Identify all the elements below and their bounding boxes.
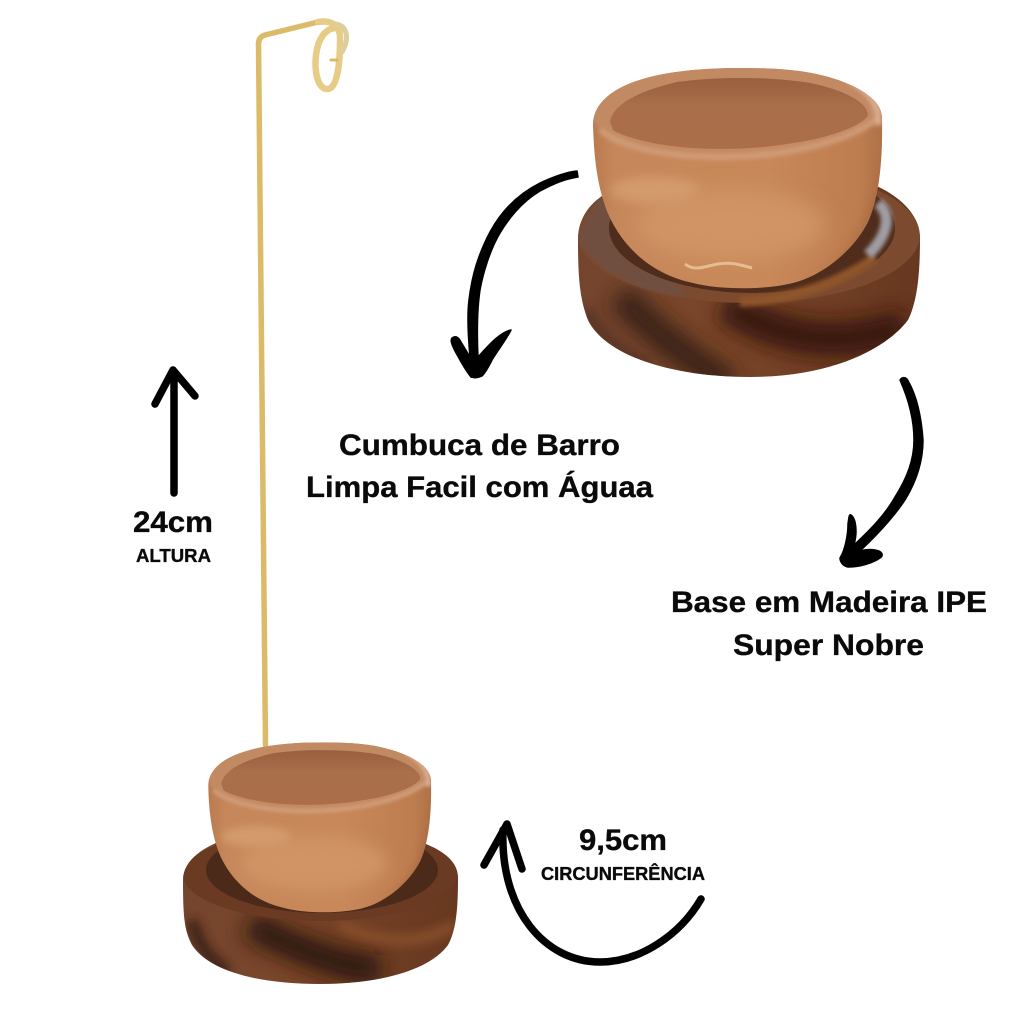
label: bowl description [306, 429, 653, 504]
label: height measurement: 24cm [133, 506, 213, 539]
large clay bowl [585, 60, 895, 300]
label: bowl description: Cumbuca de Barro [339, 429, 620, 462]
large wood base [578, 186, 920, 377]
arrow: bowl to bowl label [451, 171, 578, 378]
small wood base [183, 843, 458, 984]
arrow: height [155, 370, 195, 493]
small product photo: wood base and clay bowl [175, 736, 465, 990]
arrow: base to base label [840, 378, 923, 567]
label: bowl description: Limpa Facil com Águaa [306, 470, 653, 504]
small clay bowl [202, 736, 441, 921]
arrow: circumference [484, 824, 701, 962]
large product photo: wood base and clay bowl [570, 60, 930, 385]
label: height measurement [133, 506, 213, 566]
label: base description: Super Nobre [733, 629, 924, 662]
label: height measurement: ALTURA [136, 546, 211, 566]
gold wire stand [258, 22, 347, 745]
label: circumference measurement [541, 824, 705, 884]
label: base description: Base em Madeira IPE [671, 586, 987, 619]
label: circumference measurement: 9,5cm [579, 824, 667, 857]
label: base description [671, 586, 987, 662]
label: circumference measurement: CIRCUNFERÊNCIA [541, 863, 705, 884]
